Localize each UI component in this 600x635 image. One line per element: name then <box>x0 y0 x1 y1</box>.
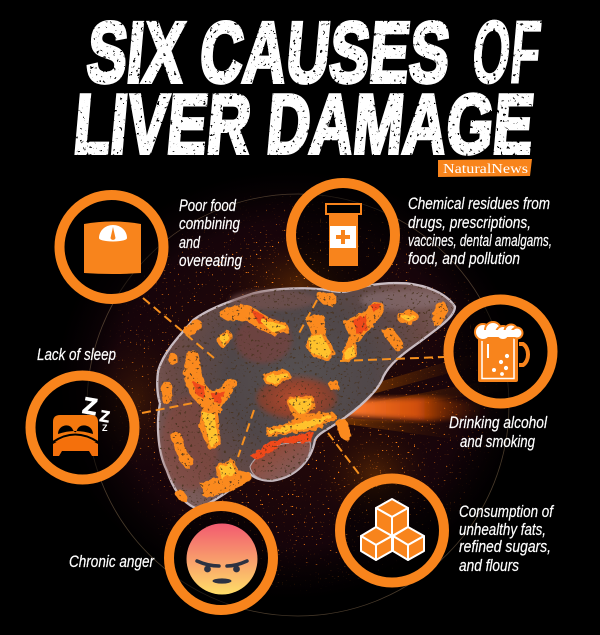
cause: chemical residues <box>291 183 552 287</box>
dashed connector lines <box>142 298 444 478</box>
text: consumption: refined sugars, <box>459 537 551 556</box>
cause: poor food combining <box>60 195 242 299</box>
text: chemical residues: drugs, prescriptions, <box>408 213 531 232</box>
red hot patches <box>193 303 382 460</box>
badge: NaturalNews: NaturalNews <box>443 161 528 176</box>
title <box>70 2 545 171</box>
faint orbit ring <box>87 194 509 616</box>
yellow lava highlights <box>203 317 414 477</box>
ring: scale <box>60 195 164 299</box>
light beam from liver toward beer <box>345 352 510 440</box>
cause: unhealthy consumption <box>340 478 555 582</box>
icon: bed with zzz: Z <box>102 423 108 433</box>
icon: beer mug <box>475 322 528 382</box>
text: drinking alcohol <box>449 413 548 451</box>
text: chemical residues <box>408 194 552 268</box>
text: drinking alcohol: Drinking alcohol <box>449 413 548 432</box>
text: poor food: combining <box>179 214 240 233</box>
background smoke behind liver <box>55 170 525 600</box>
text: consumption: Consumption of <box>459 502 555 521</box>
dark grit on lava <box>153 280 460 510</box>
text: consumption <box>459 502 555 575</box>
ring: cubes <box>340 478 444 582</box>
icon: pill bottle <box>326 204 361 266</box>
icon: bed with zzz: Z <box>98 408 111 427</box>
icon: bed with zzz <box>53 392 111 456</box>
title: OF <box>468 2 545 103</box>
glowing core <box>253 372 340 425</box>
cause: alcohol and smoking <box>448 300 552 451</box>
text: chemical residues: Chemical residues from <box>408 194 550 213</box>
lava patches <box>164 295 445 498</box>
ring: bed <box>30 376 134 480</box>
text: poor food: and <box>179 233 200 252</box>
text: poor food: overeating <box>179 251 242 270</box>
text: chemical residues: food, and pollution <box>408 249 520 268</box>
badge: NaturalNews <box>438 159 532 177</box>
text: poor food <box>179 196 242 270</box>
liver illustration <box>153 280 460 510</box>
text: poor food: Poor food <box>179 196 236 215</box>
icon: angry emoji <box>186 524 258 594</box>
text: chronic anger: Chronic anger <box>69 552 155 571</box>
icon: bathroom scale <box>84 222 141 274</box>
ring: angry face <box>169 506 273 610</box>
cause: lack of sleep <box>30 345 134 480</box>
ring: beer <box>448 300 552 404</box>
text: lack of sleep: Lack of sleep <box>37 345 116 364</box>
text: drinking alcohol: and smoking <box>460 432 535 451</box>
reddish translucent lobes <box>162 290 440 490</box>
cause: chronic anger <box>69 506 273 610</box>
liver body <box>157 283 455 509</box>
ring: pill bottle <box>291 183 395 287</box>
title: SIX CAUSES <box>83 5 454 101</box>
particle spray around liver <box>100 170 520 610</box>
icon: sugar cubes <box>361 499 424 560</box>
text: consumption: and flours <box>459 556 519 575</box>
icon: bed with zzz: Z <box>81 392 99 420</box>
text: consumption: unhealthy fats, <box>459 520 546 539</box>
gallbladder <box>250 442 310 480</box>
